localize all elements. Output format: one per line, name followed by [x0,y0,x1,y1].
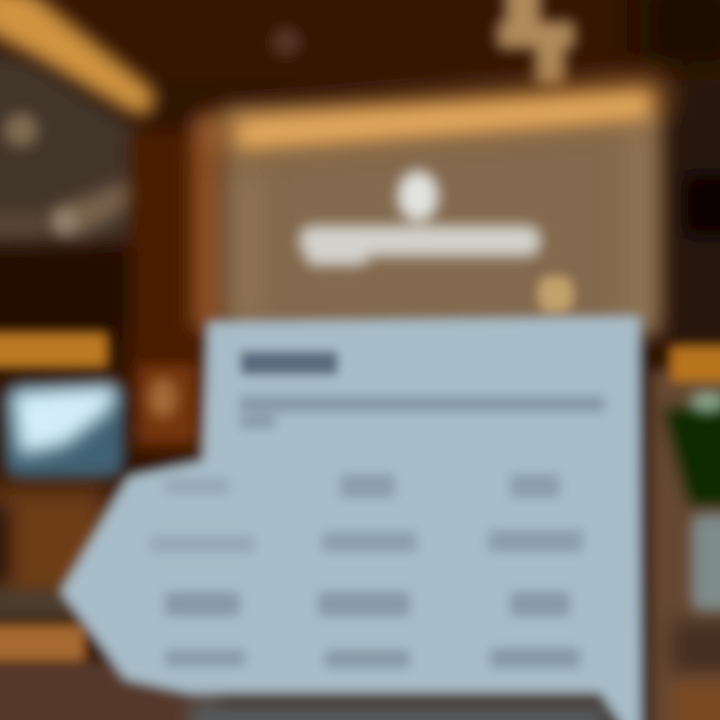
wall lit edges [232,120,655,330]
wall top glow [215,78,665,150]
left orange strip [0,333,107,367]
back wall panel [224,110,660,335]
card item: row 2 column 2 [318,592,410,668]
card item: row 2 column 3 [490,592,580,668]
ceiling fixture [498,0,574,84]
right plant [664,392,720,505]
card item: row 1 column 1 [150,478,255,553]
card item: row 2 column 1 [165,592,245,666]
card heading [240,351,338,375]
left blue screen [5,385,123,477]
right white vase [692,515,720,610]
wood pillar [130,115,226,455]
panel: information card [60,316,642,720]
bottom left orange strip [0,625,85,661]
wall logo [300,171,540,265]
ceiling light strip [0,0,155,115]
card item: row 1 column 2 [322,474,417,552]
right orange strip [670,346,720,382]
small gold lamp [538,276,573,312]
left window with dim reflections [0,50,140,245]
card item: row 1 column 3 [488,474,583,552]
ceiling spot light [271,27,301,57]
pillar lamp [149,378,177,418]
card description line [240,396,605,428]
